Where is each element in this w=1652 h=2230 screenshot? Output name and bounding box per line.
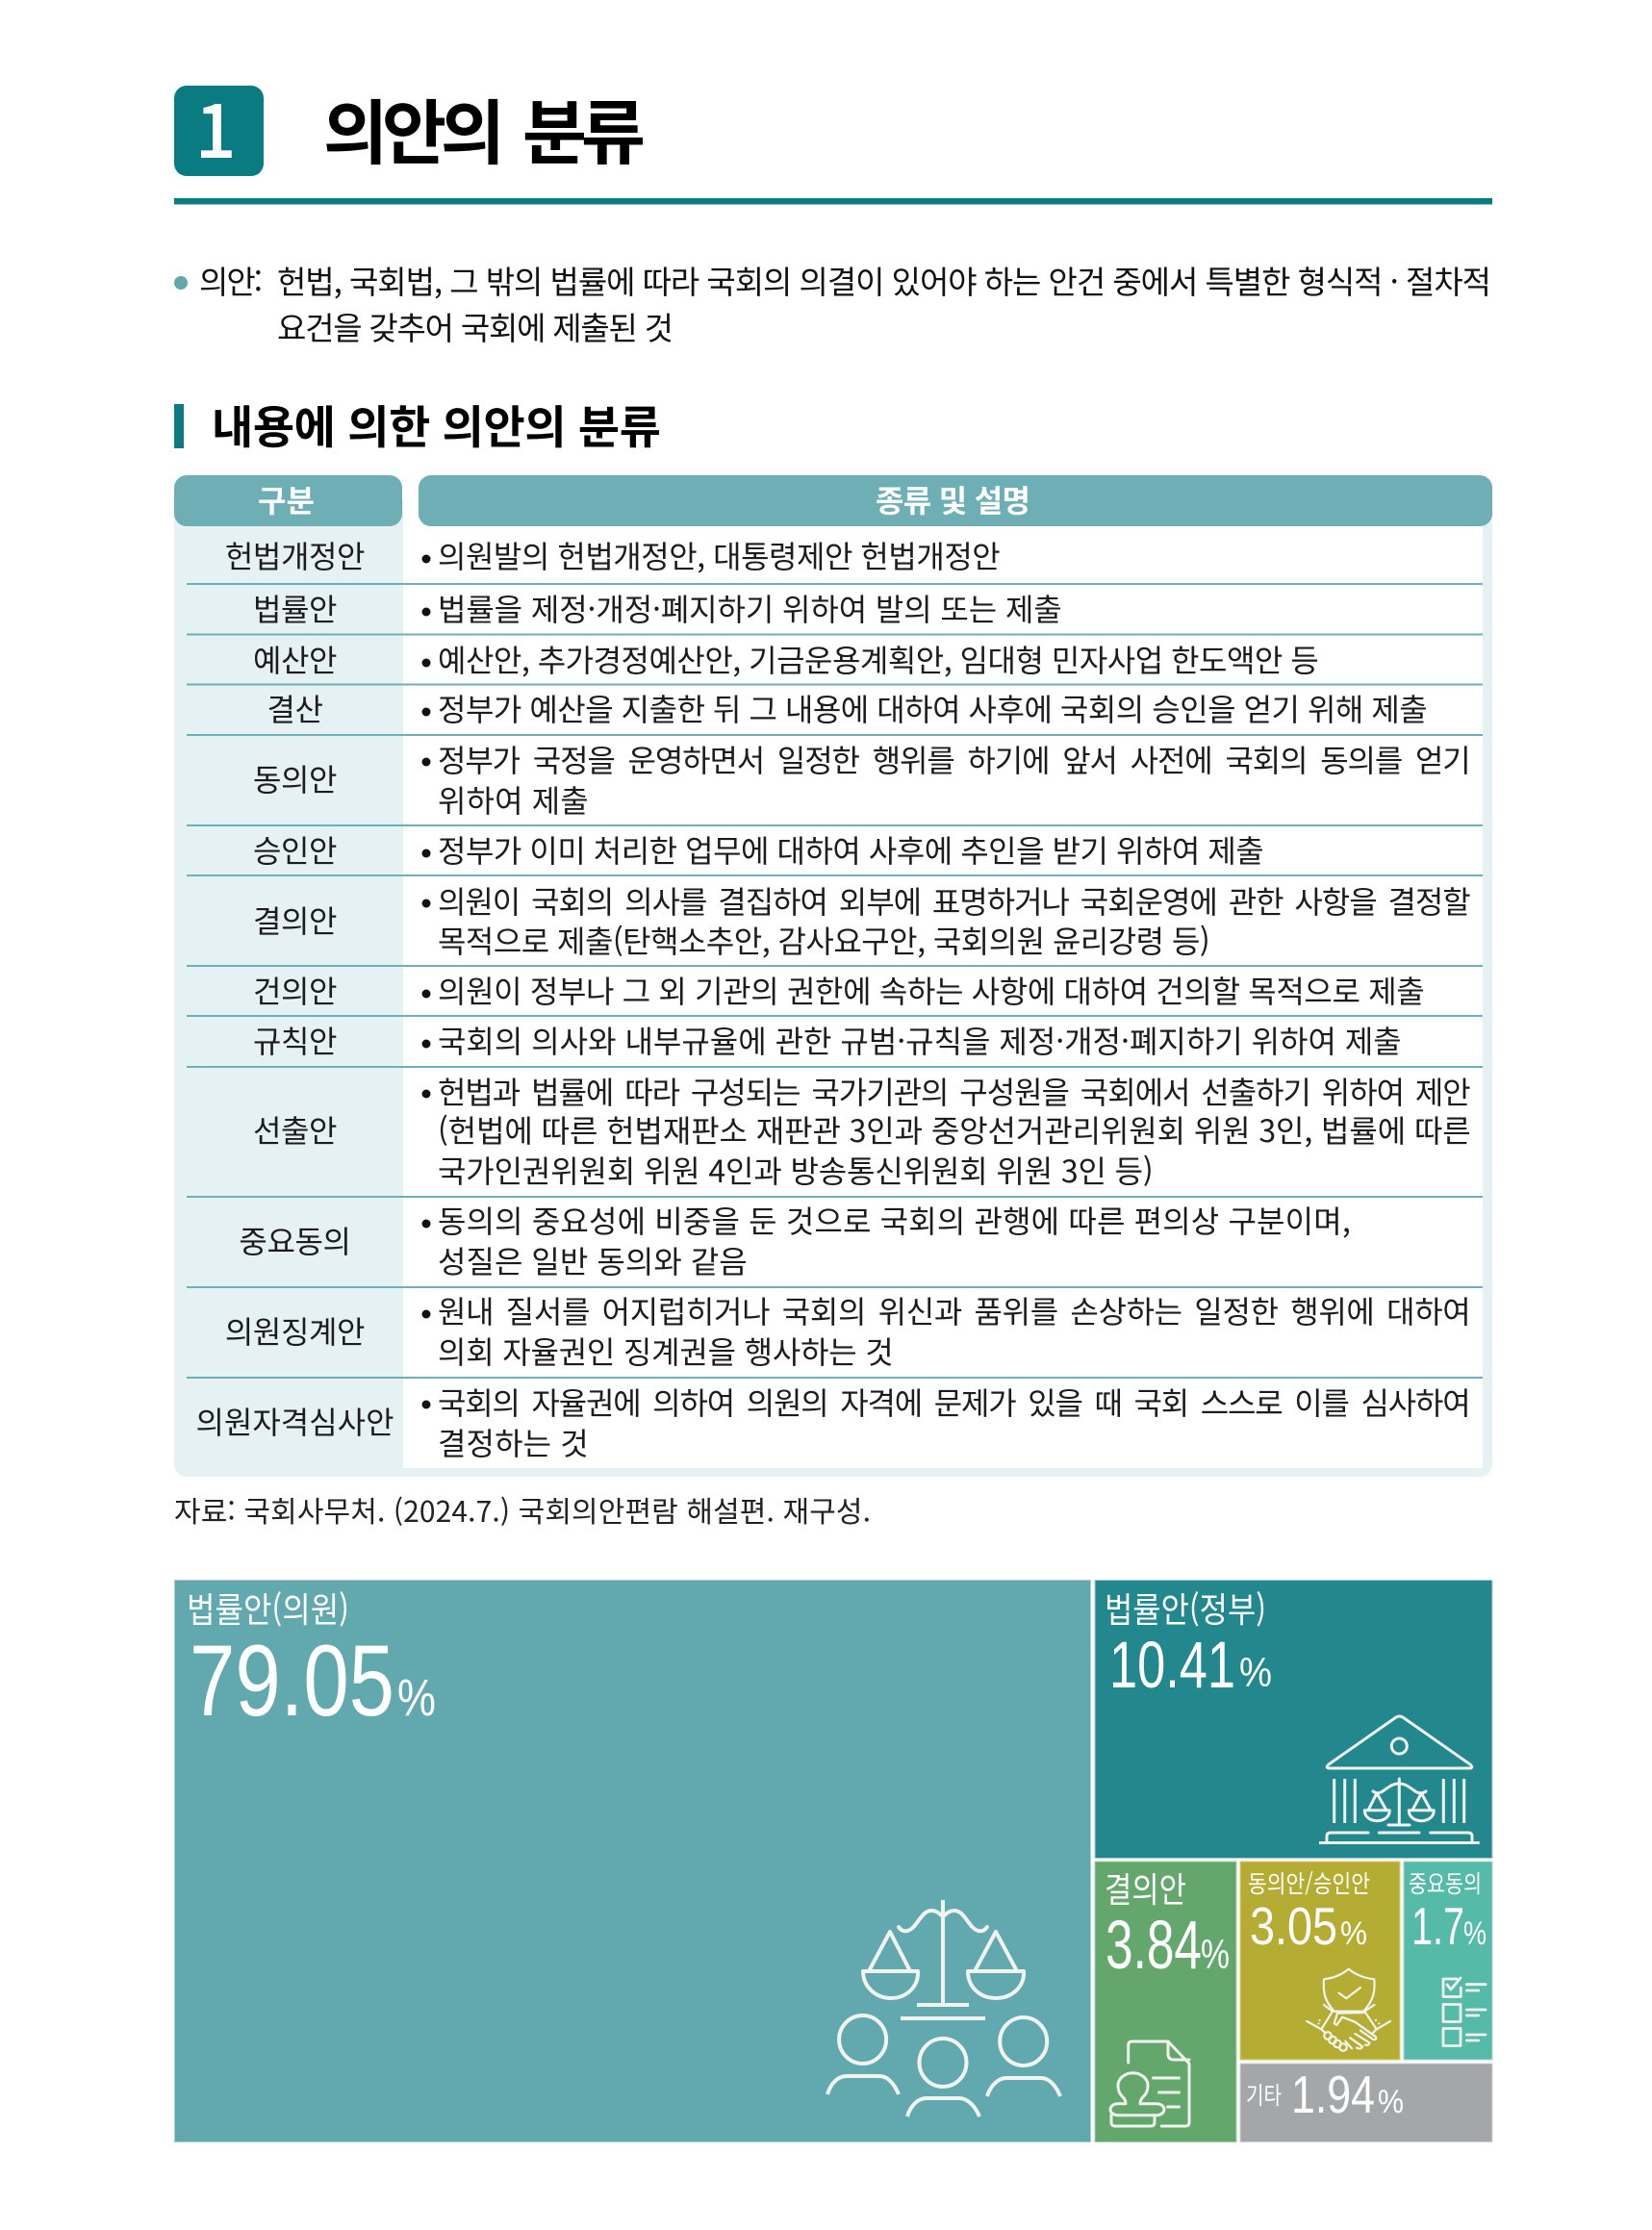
treemap block: 법률안(정부) 10.41%: 10.41 <box>1109 1628 1235 1702</box>
row: 선출안: 선출안 <box>253 1107 337 1152</box>
treemap block: 기타 1.94%: 기타 <box>1246 2077 1282 2112</box>
row: 법률안: 법률안 <box>253 586 337 630</box>
row: 의원징계안: 의회 자율권인 징계권을 행사하는 것 <box>438 1329 893 1373</box>
row: 의원징계안: 원내 질서를 어지럽히거나 국회의 위신과 품위를 손상하는 일정한 행위에 대하여 <box>438 1288 1470 1332</box>
classification table <box>174 475 1492 1477</box>
treemap block: 법률안(의원) 79.05%: % <box>397 1669 436 1727</box>
treemap block: 결의안 3.84%: 3.84 <box>1106 1908 1202 1984</box>
icon: scales and people <box>827 1900 1060 2116</box>
section number badge: 1 <box>195 75 236 178</box>
row: 결의안 <box>253 878 1470 962</box>
row: 결산: 결산 <box>267 686 323 730</box>
treemap block: 동의안/승인안 3.05%: 동의안/승인안 <box>1248 1865 1370 1900</box>
row: 헌법개정안: 헌법개정안 <box>225 533 365 577</box>
definition text block: 요건을 갖추어 국회에 제출된 것 <box>277 303 674 349</box>
table header: type and description: 종류 및 설명 <box>876 477 1030 521</box>
row: 승인안: 승인안 <box>253 827 337 872</box>
row: 규칙안: 국회의 의사와 내부규율에 관한 규범·규칙을 제정·개정·폐지하기 위하여 제출 <box>438 1018 1401 1062</box>
treemap block: 기타 1.94%: % <box>1378 2084 1404 2120</box>
row: 예산안: 예산안 <box>253 637 337 681</box>
treemap block: 중요동의 1.7% <box>1404 1862 1492 2060</box>
row: 중요동의 <box>239 1198 1350 1282</box>
row: 결산: 정부가 예산을 지출한 뒤 그 내용에 대하여 사후에 국회의 승인을 얻기 위해 제출 <box>438 686 1427 730</box>
icon: checklist <box>1443 1978 1486 2045</box>
row: 예산안: 예산안, 추가경정예산안, 기금운용계획안, 임대형 민자사업 한도액안 등 <box>438 637 1318 681</box>
treemap block: 중요동의 1.7%: % <box>1463 1915 1487 1952</box>
treemap block: 중요동의 1.7%: 1.7 <box>1411 1896 1464 1956</box>
treemap block: 법률안(의원) 79.05%: 법률안(의원) <box>187 1583 349 1633</box>
row: 의원징계안: 의원징계안 <box>225 1308 365 1353</box>
row: 선출안: (헌법에 따른 헌법재판소 재판관 3인과 중앙선거관리위원회 위원 3인, 법률에 따른 <box>438 1107 1470 1152</box>
row: 중요동의: 중요동의 <box>239 1218 351 1262</box>
table header: type and description <box>419 475 1492 526</box>
treemap chart <box>175 1580 1492 2141</box>
row: 건의안: 건의안 <box>253 968 337 1012</box>
title: 의안의 분류 <box>323 77 646 179</box>
treemap block: 결의안 3.84% <box>1095 1862 1236 2141</box>
section number badge <box>174 75 264 178</box>
treemap block: 기타 1.94%: 1.94 <box>1291 2065 1375 2124</box>
row: 건의안: 의원이 정부나 그 외 기관의 권한에 속하는 사항에 대하여 건의할 목적으로 제출 <box>438 968 1424 1012</box>
treemap block: 기타 1.94% <box>1240 2064 1492 2141</box>
row: 결의안: 목적으로 제출(탄핵소추안, 감사요구안, 국회의원 윤리강령 등) <box>438 918 1209 962</box>
table header: category <box>174 475 402 526</box>
treemap block: 결의안 3.84%: % <box>1201 1932 1230 1978</box>
icon: stamp and document <box>1110 2041 1189 2126</box>
row: 동의안: 위하여 제출 <box>438 777 588 822</box>
treemap block: 법률안(정부) 10.41%: 법률안(정부) <box>1105 1583 1266 1633</box>
treemap block: 법률안(정부) 10.41% <box>1095 1580 1492 1859</box>
treemap block: 동의안/승인안 3.05% <box>1240 1862 1400 2060</box>
row: 결의안: 의원이 국회의 의사를 결집하여 외부에 표명하거나 국회운영에 관한 사항을 결정할 <box>438 878 1470 923</box>
definition text block <box>174 257 1491 349</box>
treemap block: 중요동의 1.7%: 중요동의 <box>1409 1865 1482 1900</box>
treemap block: 동의안/승인안 3.05%: 3.05 <box>1250 1896 1337 1956</box>
row: 의원자격심사안: 의원자격심사안 <box>195 1399 394 1443</box>
icon: shield and handshake <box>1307 1969 1390 2051</box>
row: 동의안: 정부가 국정을 운영하면서 일정한 행위를 하기에 앞서 사전에 국회의 동의를 얻기 <box>438 737 1470 781</box>
row: 의원자격심사안: 국회의 자율권에 의하여 의원의 자격에 문제가 있을 때 국회 스스로 이를 심사하여 <box>438 1380 1470 1424</box>
row: 선출안: 국가인권위원회 위원 4인과 방송통신위원회 위원 3인 등) <box>438 1148 1153 1192</box>
treemap block: 결의안 3.84%: 결의안 <box>1105 1863 1186 1913</box>
table header: category: 구분 <box>258 477 315 521</box>
row: 중요동의: 성질은 일반 동의와 같음 <box>438 1238 747 1282</box>
treemap block: 동의안/승인안 3.05%: % <box>1340 1915 1367 1952</box>
row: 의원자격심사안: 결정하는 것 <box>438 1420 588 1464</box>
icon: court building with scales <box>1319 1716 1480 1843</box>
treemap block: 법률안(정부) 10.41%: % <box>1239 1650 1272 1696</box>
definition text block: 헌법, 국회법, 그 밖의 법률에 따라 국회의 의결이 있어야 하는 안건 중에서 특별한 형식적 · 절차적 <box>277 257 1491 303</box>
definition text block: 의안: <box>199 257 263 303</box>
row: 의원징계안 <box>225 1288 1470 1373</box>
row: 결의안: 결의안 <box>253 898 337 942</box>
row: 선출안 <box>253 1069 1470 1192</box>
row: 법률안: 법률을 제정·개정·폐지하기 위하여 발의 또는 제출 <box>438 586 1061 630</box>
row: 선출안: 헌법과 법률에 따라 구성되는 국가기관의 구성원을 국회에서 선출하기 위하여 제안 <box>438 1069 1470 1113</box>
source note: 자료: 국회사무처. (2024.7.) 국회의안편람 해설편. 재구성. <box>174 1488 871 1531</box>
subheading: 내용에 의한 의안의 분류 <box>212 391 661 457</box>
title rule <box>174 198 1492 204</box>
row: 헌법개정안: 의원발의 헌법개정안, 대통령제안 헌법개정안 <box>438 533 1000 577</box>
row: 규칙안: 규칙안 <box>253 1018 337 1062</box>
row: 동의안: 동의안 <box>253 756 337 800</box>
treemap block: 법률안(의원) 79.05% <box>175 1580 1091 2141</box>
row: 승인안: 정부가 이미 처리한 업무에 대하여 사후에 추인을 받기 위하여 제출 <box>438 827 1263 872</box>
treemap block: 법률안(의원) 79.05%: 79.05 <box>190 1625 394 1737</box>
row: 의원자격심사안 <box>195 1380 1470 1464</box>
row: 중요동의: 동의의 중요성에 비중을 둔 것으로 국회의 관행에 따른 편의상 구분이며, <box>438 1198 1350 1242</box>
row: 동의안 <box>253 737 1470 822</box>
